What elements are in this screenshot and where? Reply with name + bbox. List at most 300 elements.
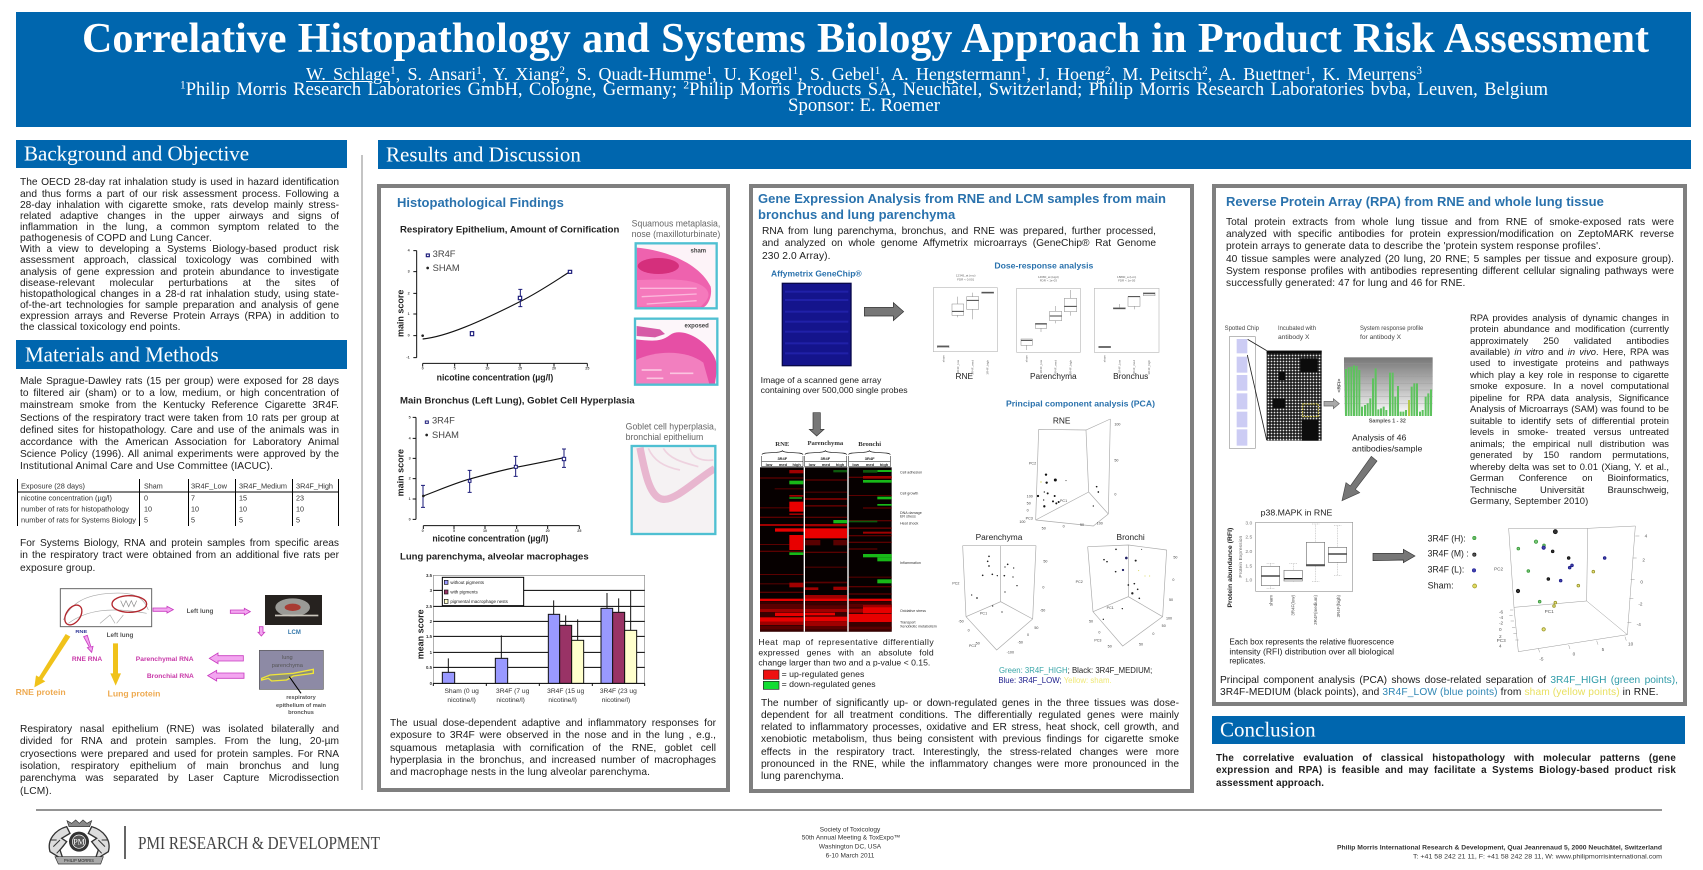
text: materials and methods: defined sites for histopathology. Care and use of the animals was in xyxy=(20,425,339,436)
chart: cornification line: 10 xyxy=(485,367,489,371)
text: background: analysis of gene expression and protein abundance to investigate xyxy=(20,267,339,278)
micrograph: exposed xyxy=(635,319,717,385)
workflow labels: epithelium of main xyxy=(276,703,327,709)
text: conclusion xyxy=(1216,753,1676,789)
chart: dose-response box plots: 3R4F_high xyxy=(1147,360,1151,375)
pink workflow arrows xyxy=(84,606,265,681)
chart: p38 MAPK box plot: Protein Expression xyxy=(1238,536,1244,578)
chart: system response profile: Samples 1 - 32 xyxy=(1369,419,1406,425)
chart: gene expression heat map: Cell adhesion xyxy=(900,471,922,475)
diagram labels: RPA workflow: antibody X xyxy=(1278,334,1310,341)
chart: gene expression heat map: med xyxy=(779,462,788,467)
text: background: histopathological changes in a 28-d rat inhalation study, using state- xyxy=(20,289,339,300)
chart: goblet cell line: 25 xyxy=(577,529,581,533)
chart: macrophage bars: without pigments xyxy=(450,580,485,585)
text: dose-dependent responses: hyperplasia in the bronchus, and increased number of macrophages xyxy=(390,755,716,766)
text: background: assessment approach, classical toxicology was combined with xyxy=(20,255,339,266)
chart: dose-response box plots: 14680_at (Hgd) xyxy=(1038,275,1059,279)
caption: box plot xyxy=(1229,637,1395,665)
text: background: inflammation in the lung, a common symptom related to the xyxy=(20,222,339,233)
chart: PCA bronchi: 50 xyxy=(1173,555,1177,559)
lung section image: parenchyma xyxy=(272,663,304,669)
label: RNE PCA: RNE xyxy=(1053,416,1071,426)
workflow labels: Lung protein xyxy=(108,689,160,699)
chart: PCA bronchi: 50 xyxy=(1169,598,1173,602)
footer meeting info: 50th Annual Meeting & ToxExpo™ xyxy=(802,834,900,842)
chart: goblet cell line: 3 xyxy=(409,456,411,460)
footer address: Philip Morris International Research & Development, Quai Jeanrenaud 5, 2000 Neuchâtel, Switzerland xyxy=(1337,844,1662,852)
chart: macrophage bars: Sham (0 ug xyxy=(444,688,479,695)
caption: goblet cell hyperplasia: bronchial epithelium xyxy=(626,432,703,442)
chart: PCA RNE: 100 xyxy=(1114,422,1120,426)
chart: goblet cell line: 1 xyxy=(409,497,411,501)
text: conclusion: The correlative evaluation of classical histopathology with molecular patterns (gene xyxy=(1216,753,1676,764)
text: differentially regulated genes: The number of significantly up- or down-regulated genes in the three tissues was dose- xyxy=(761,698,1179,708)
diagram labels: RPA workflow: for antibody X xyxy=(1360,334,1402,341)
chart: goblet cell line: 5 xyxy=(409,415,411,419)
subheading: goblet cell: Main Bronchus (Left Lung), Goblet Cell Hyperplasia xyxy=(400,396,636,406)
text: materials and methods xyxy=(20,376,339,472)
text: materials and methods: Institutional Animal Care and Use Committee (IACUC). xyxy=(20,461,273,472)
text: RPA description: which play a key role in response to cigarette xyxy=(1470,369,1669,380)
chart: p38 MAPK box plot: 3.0 xyxy=(1245,520,1253,526)
chart: PCA bronchi: 0 xyxy=(1098,630,1100,634)
header banner xyxy=(16,12,1691,127)
workflow labels: Bronchial RNA xyxy=(147,673,194,680)
chart: dose-response box plots: FDR < 1e-05 xyxy=(1118,279,1136,283)
exposure table: 5 xyxy=(144,516,148,524)
chart: p38 MAPK box plot: 1.5 xyxy=(1245,563,1253,569)
chart: goblet cell line: 0 xyxy=(422,529,424,533)
footer address: T: +41 58 242 21 11, F: +41 58 242 28 11, W: www.philipmorrisinternational.com xyxy=(1413,854,1662,860)
arrow: array to heat map xyxy=(809,413,824,436)
chart: gene expression heat map: Bronchi xyxy=(858,441,881,448)
chart: cornification line: 0 xyxy=(408,334,410,338)
text: RPA description: generated by 150 random permutations, xyxy=(1470,449,1669,460)
chart: gene expression heat map: high xyxy=(792,462,801,467)
chart: PCA RNE: PC2 xyxy=(1029,461,1036,465)
panel: histopathological findings xyxy=(377,184,730,792)
chart: dose-response box plots: sham xyxy=(1025,354,1029,362)
text: dose-dependent responses xyxy=(390,718,716,778)
chart: PCA bronchi: 0 xyxy=(1172,578,1174,582)
chart: dose-response box plots: 3R4F_low xyxy=(1039,359,1043,373)
chart: PCA RNE groups: -2 xyxy=(1499,620,1504,625)
workflow labels: Left lung xyxy=(107,632,133,639)
caption: scanned gene array: containing over 500,000 single probes xyxy=(761,385,908,395)
dim red stripes xyxy=(760,477,892,629)
text: differentially regulated genes: dependent for all treatment conditions. The differentially regulated genes were mainly xyxy=(761,710,1179,721)
illustration: spotted chip xyxy=(1229,337,1267,448)
chart: gene expression heat map: Transport xyxy=(900,620,916,624)
chart: cornification line: 20 xyxy=(552,367,556,371)
text: materials and methods: to filtered air (sham) or to a low, medium, or high concentration of xyxy=(20,388,339,399)
exposure table: Sham xyxy=(144,482,163,490)
heading: PCA: Principal component analysis (PCA) xyxy=(1006,399,1155,409)
chart: PCA bronchi: PC3 xyxy=(1094,638,1101,642)
chart: PCA bronchi: 50 xyxy=(1089,620,1093,624)
chart: dose-response box plots: 3R4F_high xyxy=(1068,360,1072,375)
chart: macrophage bars: 0.5 xyxy=(426,665,433,670)
chart: p38 MAPK box plot: 3R4F(low) xyxy=(1290,594,1295,616)
chart: goblet cell line: nicotine concentration (µg/l) xyxy=(432,534,548,544)
text: protein extracts: successfully generated: 47 for lung and 46 for RNE. xyxy=(1226,278,1465,289)
chart: goblet cell line: 15 xyxy=(515,529,519,533)
chart: PCA RNE groups: -6 xyxy=(1499,609,1504,614)
chart: PCA RNE groups: 5 xyxy=(1602,647,1605,652)
chart: macrophage bars: 3R4F (15 ug xyxy=(547,688,584,695)
chart: PCA RNE groups: -4 xyxy=(1499,615,1504,620)
diagram labels: RPA workflow: Incubated with xyxy=(1278,325,1316,332)
chart: PCA RNE groups: -2 xyxy=(1638,601,1643,606)
footer meeting info: 6-10 March 2011 xyxy=(826,852,875,860)
sponsor: Sponsor: E. Roemer xyxy=(788,95,940,116)
heading: Results and Discussion xyxy=(378,140,1691,169)
chart: cornification line: SHAM xyxy=(433,263,460,273)
subheading: macrophages: Lung parenchyma, alveolar macrophages xyxy=(400,552,589,562)
chart: PCA parenchyma: PC2 xyxy=(952,581,959,585)
chart: PCA RNE: 50 xyxy=(1080,523,1084,527)
panel title: gene expression xyxy=(758,191,1166,222)
exposure table xyxy=(17,479,339,526)
text: RPA description: Technische Universität Braunschweig, xyxy=(1470,484,1669,495)
heading: Materials and Methods xyxy=(16,340,347,369)
caption: goblet cell hyperplasia xyxy=(626,422,716,442)
footer brand: PMI RESEARCH & DEVELOPMENT xyxy=(138,833,380,853)
chart: dose-response box plots: Parenchyma xyxy=(1030,371,1077,381)
chart: p38 MAPK box plot: p38.MAPK in RNE xyxy=(1261,508,1333,518)
chart: macrophage bars: 3R4F (7 ug xyxy=(496,688,530,695)
text: background: With a view to developing a Systems Biology-based product risk xyxy=(20,244,339,255)
caption: squamous metaplasia: Squamous metaplasia, xyxy=(632,219,720,229)
text: systems biology samples: in the respiratory tract were obtained from an additional five rats per xyxy=(20,550,339,561)
chart: PCA RNE groups xyxy=(1494,526,1648,661)
legend: PCA groups: 3R4F (H): xyxy=(1428,534,1466,544)
chart: cornification line: 3R4F xyxy=(433,249,456,259)
chart: gene expression heat map: 3R4F xyxy=(777,456,788,461)
workflow labels: RNE xyxy=(75,629,88,635)
text: protein extracts: Total protein extracts from whole lung tissue and from RNE of smoke-exposed rats were xyxy=(1226,217,1674,228)
legend: heat map xyxy=(763,669,876,689)
micrograph: exposed: exposed xyxy=(685,324,709,330)
workflow labels: LCM xyxy=(288,630,301,636)
exposure table: 10 xyxy=(239,504,247,514)
chart: PCA RNE: 50 xyxy=(1114,458,1118,462)
text: background: and thus forms a part of our risk assessment process. Following a xyxy=(20,189,339,200)
chart: cornification line: 3 xyxy=(408,270,410,274)
chart: macrophage bars: nicotine/l) xyxy=(496,697,525,704)
legend: PCA colours: Blue: 3R4F_LOW; Yellow: sham. xyxy=(998,675,1112,684)
chart: PCA RNE: 100 xyxy=(1097,521,1103,525)
exposure table: number of rats for Systems Biology xyxy=(21,516,136,524)
chart: gene expression heat map: Parenchyma xyxy=(807,440,844,447)
chart: gene expression heat map: Cell growth xyxy=(900,492,918,496)
chart: cornification line: nicotine concentration (µg/l) xyxy=(437,373,553,383)
text: RPA description: pipeline for RPA data analysis, Significance xyxy=(1470,392,1669,403)
chart: PCA bronchi xyxy=(1076,532,1177,649)
chart: macrophage bars: nicotine/l) xyxy=(548,697,577,704)
chart: macrophage bars xyxy=(416,573,645,704)
workflow labels xyxy=(16,608,327,716)
chart: PCA RNE: 0 xyxy=(1027,509,1029,513)
label: analysis of 46 antibodies: Analysis of 46 xyxy=(1352,433,1407,443)
chart: gene expression heat map xyxy=(760,440,937,632)
caption: box plot: replicates. xyxy=(1229,656,1266,665)
chart: gene expression heat map: 3R4F xyxy=(865,456,875,461)
text: background: pathogenesis of COPD and Lung Cancer. xyxy=(20,233,212,244)
chart: gene expression heat map: low xyxy=(852,462,860,467)
legend: PCA colours: Green: 3R4F_HIGH; Black: 3R4F_MEDIUM; xyxy=(999,665,1152,674)
chart: macrophage bars: 1 xyxy=(430,650,433,655)
chart: gene expression heat map: Heat shock xyxy=(900,521,918,525)
chart: PCA parenchyma: 50 xyxy=(1034,626,1038,630)
chart: PCA RNE groups: 0 xyxy=(1640,579,1643,584)
chart: macrophage bars: nicotine/l) xyxy=(602,697,630,704)
chart: goblet cell line xyxy=(396,415,581,544)
arrow: analysis to boxplot xyxy=(1342,456,1377,501)
chart: goblet cell line: main score xyxy=(396,449,406,496)
chart: PCA parenchyma: 0 xyxy=(1042,585,1044,589)
chart: cornification line: 25 xyxy=(585,367,589,371)
text: PCA separation: Principal component analysis (PCA) shows dose-related separation of 3R4F_HIGH (green points), xyxy=(1220,675,1678,686)
chart: macrophage bars: 3R4F (23 ug xyxy=(600,688,637,695)
exposure table: 10 xyxy=(296,504,304,514)
text: background xyxy=(20,177,340,333)
chart: macrophage bars: 2.5 xyxy=(426,604,433,609)
diagram labels: RPA workflow: Spotted Chip xyxy=(1225,325,1259,332)
title: Correlative Histopathology and Systems Biology Approach in Product Risk Assessment xyxy=(82,16,1649,62)
text: RPA description: used to investigate proteins and pathways xyxy=(1470,357,1669,368)
green stripes xyxy=(789,470,892,583)
text: RNE isolation: Respiratory nasal epithelium (RNE) was isolated bilaterally and xyxy=(20,724,339,735)
chart: goblet cell line: 5 xyxy=(453,529,455,533)
panel: reverse protein array xyxy=(1212,184,1687,706)
caption: scanned gene array: Image of a scanned gene array xyxy=(761,375,882,385)
medium red stripes xyxy=(760,470,892,626)
chart: p38 MAPK box plot: sham xyxy=(1268,595,1273,606)
chart: PCA parenchyma: -50 xyxy=(1018,641,1023,645)
chart: system response profile xyxy=(1336,357,1433,425)
chart: goblet cell line: 4 xyxy=(409,436,412,440)
text: background: of-the-art technologies for sample preparation and analysis of gene xyxy=(20,300,339,311)
micrograph: goblet cell xyxy=(632,446,715,534)
panel title: gene expression: bronchus and lung parenchyma xyxy=(758,207,955,222)
chart: goblet cell line: 3R4F xyxy=(432,416,455,426)
label: Affymetrix GeneChip: Affymetrix GeneChip® xyxy=(771,269,862,279)
footer meeting info xyxy=(802,826,900,860)
caption: goblet cell hyperplasia: Goblet cell hyperplasia, xyxy=(626,422,716,432)
chart: gene expression heat map: Xenobiotic metabolism xyxy=(900,624,937,628)
chart: PCA RNE groups: 2 xyxy=(1642,557,1645,562)
chart: cornification line: main score xyxy=(396,290,406,337)
chart: dose-response box plots: RNE xyxy=(956,371,974,381)
text: systems biology samples xyxy=(20,538,339,574)
chart: PCA parenchyma: PC3 xyxy=(969,644,976,648)
text: RNE isolation: cryosections were prepared and used for protein samples. For RNA xyxy=(20,749,339,760)
legend: heat map: = down-regulated genes xyxy=(782,679,876,689)
exposure table: 10 xyxy=(191,504,199,514)
chart: macrophage bars: mean score xyxy=(416,609,426,659)
text: RNE isolation: isolation, respiratory epithelium of main bronchus and lung xyxy=(20,761,339,772)
chart: p38 MAPK box plot: 3R4F(high) xyxy=(1336,594,1341,617)
chart: macrophage bars: 3.5 xyxy=(426,573,433,578)
chart: macrophage bars: with pigments xyxy=(450,589,479,594)
image: scanned gene array xyxy=(782,283,851,366)
chart: macrophage bars: 0 xyxy=(430,681,433,686)
chart: PCA parenchyma xyxy=(952,532,1047,655)
chart: dose-response box plots: 3R4F_high xyxy=(985,360,989,375)
heading: Background and Objective: Background and Objective xyxy=(24,142,249,166)
chart: PCA RNE groups: PC2 xyxy=(1494,566,1503,571)
chart: dose-response box plots: 3R4F_med xyxy=(1132,360,1136,375)
caption: squamous metaplasia: nose (maxilloturbinate) xyxy=(632,229,720,239)
exposure table: Exposure (28 days) xyxy=(21,482,85,490)
text: background: 28-day inhalation with cigarette smoke, rats develop mainly stress- xyxy=(20,200,339,211)
caption: heat map: change larger than two and a p-value < 0.15. xyxy=(758,658,930,668)
text: RPA description: suitable to identify sets of differential protein xyxy=(1470,415,1669,426)
chart: goblet cell line: 20 xyxy=(546,529,550,533)
heading: dose-response analysis: Dose-response analysis xyxy=(994,261,1094,271)
arrow: boxplot to PCA xyxy=(1373,549,1415,563)
chart: PCA bronchi: 50 xyxy=(1162,624,1166,628)
chart: gene expression heat map: Inflammation xyxy=(900,561,921,565)
panel title: gene expression: Gene Expression Analysis from RNE and LCM samples from main xyxy=(758,191,1166,206)
text: RPA description: German Conference on Bioinformatics, xyxy=(1470,472,1669,483)
heading: Background and Objective xyxy=(16,140,347,168)
chart: macrophage bars: 2 xyxy=(430,619,433,624)
chart: p38 MAPK box plot: 2.5 xyxy=(1245,535,1253,541)
chart: PCA parenchyma: 0 xyxy=(968,629,970,633)
label: analysis of 46 antibodies xyxy=(1352,433,1423,454)
chart: PCA parenchyma: Parenchyma xyxy=(976,532,1023,542)
text: differentially regulated genes: pronounced in the RNE, while the inflammatory changes were more pronounced in the xyxy=(761,759,1179,770)
chart: dose-response box plots xyxy=(933,274,1159,381)
text: materials and methods: Sections of the respiratory tract were taken from 10 rats per group at xyxy=(20,412,339,424)
arrow: array to dose response xyxy=(864,303,904,321)
text: RPA description: approximately 250 validated antibodies xyxy=(1470,335,1669,346)
text: materials and methods: Male Sprague-Dawley rats (15 per group) were exposed for 28 days xyxy=(20,376,339,387)
text: protein extracts: System response profiles with antibodies representing different cellular signaling pathways were xyxy=(1226,266,1674,277)
illustration: incubated array xyxy=(1267,351,1322,441)
diagram labels: RPA workflow: System response profile xyxy=(1360,325,1424,332)
exposure table: 3R4F_Medium xyxy=(239,482,287,490)
chart: PCA parenchyma: -50 xyxy=(958,619,964,623)
LCM image xyxy=(265,595,322,625)
panel title: reverse protein array: Reverse Protein Array (RPA) from RNE and whole lung tissue xyxy=(1226,194,1604,209)
yellow protein arrows xyxy=(34,634,121,687)
text: RPA description: levels in smoke- treated versus untreated xyxy=(1470,426,1669,437)
text: differentially regulated genes: xenobiotic metabolism, thus being consistent with previous findings for cigarette smoke xyxy=(761,734,1179,745)
chart: gene expression heat map: high xyxy=(836,462,845,467)
chart: p38 MAPK box plot: 3R4F(medium) xyxy=(1313,594,1318,625)
text: protein extracts: 40 tissue samples were analyzed (20 lung, 20 RNE; 5 samples per tissue and exposure group). xyxy=(1226,254,1674,265)
chart: dose-response box plots: sham xyxy=(1103,354,1107,362)
text: RNA preparation: and analyzed on whole genome Affymetrix microarrays (GeneChip® Rat Genome xyxy=(762,238,1156,249)
chart: cornification line: 15 xyxy=(518,367,522,371)
chart: cornification line: 2 xyxy=(408,291,410,295)
chart: dose-response box plots: 18890_a (Lcn) xyxy=(1117,275,1136,279)
chart: p38 MAPK box plot: Protein abundance (RFI) xyxy=(1227,528,1234,608)
text: dose-dependent responses: and macrophage nests in the lung alveolar parenchyma. xyxy=(390,767,650,778)
text: RPA description: smoke exposure. In a novel computational xyxy=(1470,380,1669,391)
chart: PCA RNE: PC1 xyxy=(1060,499,1067,503)
chart: PCA bronchi: PC2 xyxy=(1076,580,1083,584)
chart: PCA bronchi: 50 xyxy=(1139,642,1143,646)
text: differentially regulated genes: effects in the respiratory tract. Interestingly, the stress-related changes were more xyxy=(761,747,1179,758)
chart: PCA RNE groups: 0 xyxy=(1499,627,1502,632)
text: RNE isolation: (LCM). xyxy=(20,786,52,797)
legend: PCA groups xyxy=(1428,534,1477,591)
chart: PCA RNE: 0 xyxy=(1063,525,1065,529)
sample workflow diagram xyxy=(16,589,327,716)
chart: dose-response box plots: FDR < 1e-03 xyxy=(1040,279,1057,283)
bright red stripes xyxy=(760,502,892,622)
text: RNE isolation: divided for RNA and protein samples. From the lung, 20-µm xyxy=(20,736,339,747)
text: RPA description: Analysis of Microarrays (SAM) was found to be xyxy=(1470,403,1669,414)
chart: goblet cell line: 2 xyxy=(409,477,411,481)
chart: PCA RNE: 50 xyxy=(1027,501,1031,505)
legend: PCA groups: 3R4F (L): xyxy=(1428,565,1464,575)
text: differentially regulated genes: related to inflammatory processes, oxidative and ER stress, heat shock, cell growth, and xyxy=(761,722,1179,733)
text: background: expression arrays and Reverse Protein Arrays (RPA) in addition to xyxy=(20,311,339,322)
lung section image xyxy=(259,650,323,693)
caption: scanned gene array xyxy=(761,375,908,395)
chart: dose-response box plots: 3R4F_low xyxy=(956,359,960,373)
heading: Conclusion: Conclusion xyxy=(1220,718,1316,742)
chart: macrophage bars: 1.5 xyxy=(426,634,433,639)
exposure table: 3R4F_Low xyxy=(191,482,228,490)
text: materials and methods: accordance with the American Association for Laboratory Animal xyxy=(20,437,339,448)
text: differentially regulated genes xyxy=(761,698,1179,782)
text: RPA description: Germany, September 2010) xyxy=(1470,495,1588,506)
exposure table: 5 xyxy=(239,516,243,524)
authors: W. Schlage1, S. Ansari1, Y. Xiang2, S. Quadt-Humme1, U. Kogel1, S. Gebel1, A. Hengstermann1, J. Hoeng2, M. Peitsch2, A. Buettner1, K. Meurrens3 xyxy=(306,64,1422,84)
chart: PCA RNE: 50 xyxy=(1042,526,1046,530)
text: systems biology samples: For Systems Biology, RNA and protein samples from specific areas xyxy=(20,538,339,549)
text: systems biology samples: exposure group. xyxy=(20,563,95,574)
chart: gene expression heat map: Oxidative stress xyxy=(900,609,926,613)
heading: Conclusion xyxy=(1212,716,1685,744)
chart: PCA parenchyma: -50 xyxy=(1040,609,1045,613)
workflow labels: bronchus xyxy=(288,710,314,716)
text: protein extracts: protein arrays to generate data to describe the 'protein system response profiles'. xyxy=(1226,241,1601,252)
chart: PCA RNE groups: 2 xyxy=(1499,634,1502,639)
footer address xyxy=(1337,844,1662,860)
chart: system response profile: <RFI> xyxy=(1336,379,1342,393)
chart: PCA parenchyma: -100 xyxy=(1007,651,1014,655)
text: materials and methods: Science Policy (1996). All animal experiments were approved by the xyxy=(20,449,339,460)
text: protein extracts xyxy=(1226,217,1674,289)
text: PCA separation: 3R4F-MEDIUM (black points), and 3R4F_LOW (blue points) from sham (yellow points) in RNE. xyxy=(1220,687,1659,698)
legend: PCA groups: 3R4F (M) : xyxy=(1428,549,1469,559)
lung section image: lung xyxy=(282,655,293,661)
micrograph: sham: sham xyxy=(691,248,706,254)
heading: Materials and Methods: Materials and Methods xyxy=(25,342,219,366)
diagram labels: RPA workflow xyxy=(1225,325,1424,341)
caption: heat map: expressed genes with an absolute fold xyxy=(758,648,934,658)
chart: PCA RNE: 100 xyxy=(1027,495,1033,499)
chart: macrophage bars: 3 xyxy=(430,588,433,593)
chart: PCA RNE groups: 4 xyxy=(1645,533,1648,538)
chart: p38 MAPK box plot: 1.0 xyxy=(1245,578,1253,584)
text: materials and methods: mainstream smoke from the Kentucky Reference Cigarette 3R4F. xyxy=(20,400,339,411)
text: background: related adaptive changes in the upper airways and signs of xyxy=(20,211,339,222)
chart: PCA RNE groups: PC3 xyxy=(1497,638,1506,643)
chart: p38 MAPK box plot xyxy=(1227,508,1353,625)
chart: PCA bronchi: 100 xyxy=(1166,616,1172,620)
chart: macrophage bars: nicotine/l) xyxy=(447,697,476,704)
chart: dose-response box plots: Bronchus xyxy=(1113,371,1148,381)
